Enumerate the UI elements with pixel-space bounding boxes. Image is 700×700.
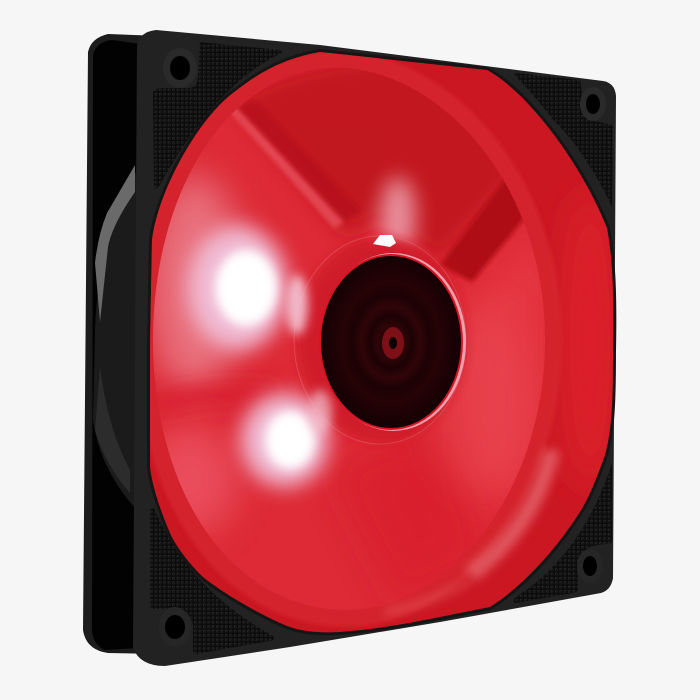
right area lightening bbox=[476, 258, 545, 492]
lower left haze bbox=[142, 425, 238, 535]
front frame bbox=[133, 30, 616, 666]
collar glow lower left bbox=[308, 390, 332, 434]
top LED glow bbox=[380, 177, 416, 253]
collar light ring bbox=[294, 236, 466, 444]
rotor base bbox=[155, 116, 526, 610]
red illuminated rotor bbox=[140, 40, 620, 640]
upper left shadow bbox=[236, 100, 360, 222]
inner rotor area bbox=[153, 68, 545, 610]
grey blade edge bbox=[95, 165, 135, 322]
mounting hole: top left bbox=[163, 48, 197, 88]
hub recess bbox=[321, 256, 461, 428]
blade behind frame bbox=[93, 170, 137, 510]
mesh corner: top right bbox=[515, 73, 613, 207]
inner band bbox=[153, 68, 545, 610]
hub centre bbox=[382, 327, 404, 359]
mounting hole: bottom right bbox=[577, 549, 603, 583]
blade shadow: top bbox=[243, 68, 504, 258]
right ring brightening bbox=[564, 190, 616, 490]
left haze bbox=[147, 175, 243, 395]
hub inner red ring bbox=[319, 254, 463, 430]
mounting hole: top right bbox=[580, 87, 606, 121]
hub rim bbox=[320, 253, 466, 431]
mounting hole: bottom left bbox=[159, 607, 191, 647]
lower blade edge bbox=[95, 367, 130, 493]
mesh corner: bottom left bbox=[150, 508, 274, 654]
hub collar bbox=[298, 238, 466, 442]
motor hub bbox=[286, 236, 466, 444]
upper left strut bbox=[226, 106, 345, 228]
frame opening rim bbox=[150, 52, 613, 632]
mesh corner: top left bbox=[153, 42, 282, 189]
LED highlight bbox=[373, 235, 396, 247]
lower right pale band bbox=[470, 450, 552, 575]
dark streak between LEDs bbox=[156, 371, 258, 416]
outer ring bbox=[140, 40, 620, 640]
fan bbox=[83, 30, 620, 666]
right glow bbox=[432, 322, 506, 484]
collar glow left bbox=[286, 275, 308, 335]
mesh corner: bottom right bbox=[514, 463, 612, 603]
lower LED glow bbox=[241, 393, 329, 487]
back frame bbox=[83, 34, 160, 654]
strut: upper right bbox=[440, 172, 525, 282]
left LED glow bbox=[188, 226, 288, 350]
lower area bbox=[346, 444, 480, 582]
lower pale band bbox=[385, 580, 470, 612]
